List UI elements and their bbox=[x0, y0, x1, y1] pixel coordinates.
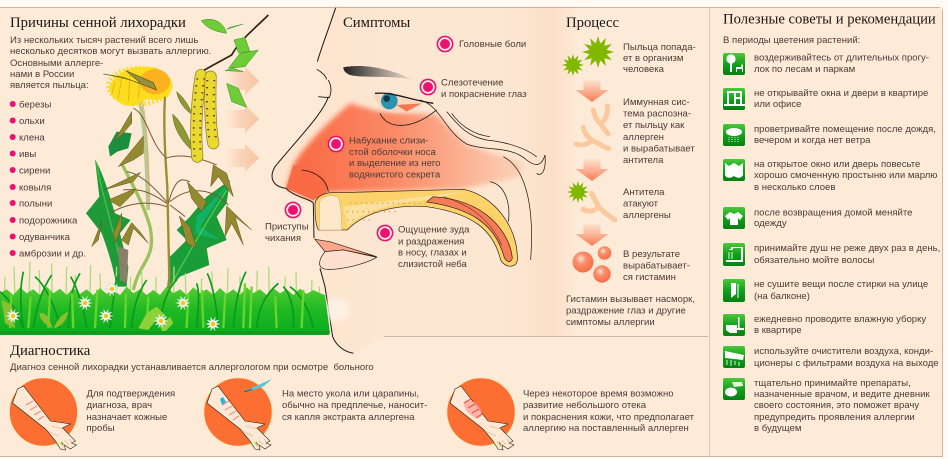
heading: process: Процесс bbox=[566, 15, 620, 31]
step 3: attack bbox=[567, 181, 671, 221]
tip: medication: предупредить проявления аллергии bbox=[754, 412, 915, 423]
step: reaction bbox=[447, 378, 695, 450]
illustration: grass meadow bbox=[0, 262, 330, 335]
step 1: pollen enters: ет в организм bbox=[623, 53, 684, 64]
allergen list: березы bbox=[19, 100, 51, 110]
lips bbox=[315, 239, 377, 257]
tip: air purifiers bbox=[723, 346, 939, 369]
intro text bbox=[10, 35, 211, 91]
tip: ventilate: вечером и когда нет ветра bbox=[754, 135, 871, 146]
process summary: симптомы аллергии bbox=[566, 317, 655, 328]
step: skin tests: диагноза, врач bbox=[86, 400, 152, 411]
tip: wet cleaning bbox=[723, 314, 926, 336]
heading: causes: Причины сенной лихорадки bbox=[10, 15, 186, 31]
symptom: itching: и раздражения bbox=[398, 236, 464, 248]
tip: windows: или офисе bbox=[754, 99, 801, 110]
step 4: histamine: вырабатывает- bbox=[623, 260, 690, 272]
step: reaction: аллергию на поставленный аллерген bbox=[523, 423, 689, 434]
symptom: itching: в носу, глазах и bbox=[398, 248, 467, 258]
allergen list: сирени bbox=[19, 166, 50, 176]
allergen list: амброзии и др. bbox=[19, 248, 86, 260]
face outline bbox=[272, 7, 353, 353]
panel: tips bbox=[723, 12, 940, 434]
arrow 1 bbox=[576, 80, 608, 102]
tip: medication: назначенные врачом, и ведите дневник bbox=[754, 389, 931, 400]
arrow 2 bbox=[576, 159, 608, 181]
tip: shower: обязательно мойте волосы bbox=[754, 255, 875, 266]
step 3: attack: аллергены bbox=[623, 210, 671, 221]
illustration: oat plant bbox=[92, 92, 252, 310]
symptom: swelling: водянистого секрета bbox=[349, 170, 441, 180]
step 2: antibodies: Иммунная сис- bbox=[623, 97, 690, 108]
heading: tips: Полезные советы и рекомендации bbox=[723, 12, 936, 28]
symptom: sneezing bbox=[265, 202, 309, 244]
tip: ventilate bbox=[723, 124, 936, 146]
symptom: tearing bbox=[420, 78, 527, 100]
symptom: itching: слизистой неба bbox=[398, 259, 467, 270]
symptom: itching: Ощущение зуда bbox=[398, 224, 470, 236]
allergen list: подорожника bbox=[19, 216, 78, 226]
allergen list: ольхи bbox=[19, 116, 45, 127]
tip: wet sheet bbox=[723, 159, 937, 193]
tip: wet sheet: хорошо смоченную простыню или марлю bbox=[754, 170, 937, 181]
intro text: нами в России bbox=[10, 69, 74, 80]
symptom: swelling: Набухание слизи- bbox=[349, 136, 428, 146]
step 1: pollen enters: человека bbox=[623, 64, 665, 75]
step: reaction: Через некоторое время возможно bbox=[523, 388, 674, 400]
allergen list: одуванчика bbox=[19, 232, 71, 243]
eye bbox=[373, 93, 437, 125]
tip: wet sheet: в несколько слоев bbox=[754, 182, 835, 193]
tip: change clothes: одежду bbox=[754, 218, 787, 229]
tip: forest: воздерживайтесь от длительных прогу- bbox=[754, 52, 929, 64]
tip: laundry: не сушите вещи после стирки на улице bbox=[754, 279, 928, 290]
sinus contour bbox=[420, 100, 545, 260]
process summary: Гистамин вызывает насморк, bbox=[566, 294, 695, 305]
tip: forest: лок по лесам и паркам bbox=[754, 64, 855, 75]
tip: change clothes bbox=[723, 207, 912, 229]
step: allergen drop: обычно на предплечье, наносит- bbox=[282, 400, 427, 411]
tip: laundry bbox=[723, 279, 928, 302]
step 2: antibodies: и вырабатывает bbox=[623, 144, 695, 154]
panel: diagnostics bbox=[10, 343, 695, 450]
step 2: antibodies: тема распозна- bbox=[623, 108, 691, 120]
nasal swelling bbox=[287, 103, 523, 200]
step: skin tests: пробы bbox=[86, 423, 115, 434]
tip: shower: принимайте душ не реже двух раз в день, bbox=[754, 243, 940, 254]
grass body bbox=[0, 287, 330, 333]
tip: windows: не открывайте окна и двери в квартире bbox=[754, 88, 928, 99]
step 1: pollen enters bbox=[562, 36, 696, 76]
step 2: antibodies bbox=[576, 97, 695, 166]
step: reaction: и покраснения кожи, что предполагает bbox=[523, 412, 695, 423]
panel: causes plants and grass bbox=[0, 15, 330, 335]
tip: medication: тщательно принимайте препараты, bbox=[754, 378, 911, 389]
face skin bbox=[272, 7, 580, 353]
allergen list: ивы bbox=[19, 149, 36, 160]
symptom: swelling: и выделение из него bbox=[349, 158, 440, 169]
symptom: sneezing: чихания bbox=[265, 233, 301, 244]
tip: ventilate: проветривайте помещение после дождя, bbox=[754, 124, 936, 135]
symptom: tearing: Слезотечение bbox=[441, 78, 503, 88]
tip: change clothes: после возвращения домой меняйте bbox=[754, 208, 912, 218]
step 2: antibodies: антитела bbox=[623, 155, 664, 166]
allergen list: ковыля bbox=[19, 182, 51, 194]
tip: wet cleaning: ежедневно проводите влажную уборку bbox=[754, 314, 926, 325]
symptom: swelling: стой оболочки носа bbox=[349, 147, 436, 158]
tip: wet sheet: на открытое окно или дверь повесьте bbox=[754, 159, 920, 170]
tip: medication: в будущем bbox=[754, 423, 801, 434]
step 3: attack: атакуют bbox=[623, 198, 659, 210]
allergen list bbox=[10, 100, 86, 260]
tips subheading: В периоды цветения растений: bbox=[723, 35, 860, 46]
directional pollen arrows bbox=[224, 67, 259, 172]
symptom: headache: Головные боли bbox=[459, 39, 526, 50]
symptom: sneezing: Приступы bbox=[265, 222, 309, 232]
allergen list: клена bbox=[19, 132, 45, 144]
step 2: antibodies: аллерген bbox=[623, 132, 664, 143]
step: skin tests: Для подтверждения bbox=[86, 388, 175, 400]
tip: medication: своего состояния, это поможет врачу bbox=[754, 400, 919, 411]
tip: medication bbox=[723, 378, 931, 434]
step 2: antibodies: ет пыльцу как bbox=[623, 120, 685, 131]
intro text: Основными аллерге- bbox=[10, 58, 103, 69]
intro text: несколько десятков могут вызвать аллергию. bbox=[10, 46, 211, 57]
symptom: tearing: и покраснение глаз bbox=[441, 89, 527, 100]
symptom: swelling bbox=[328, 136, 441, 180]
illustration: birch branch and catkins bbox=[194, 15, 268, 157]
symptom: headache bbox=[437, 36, 526, 52]
tip: air purifiers: используйте очистители воздуха, конди- bbox=[754, 346, 933, 357]
step 4: histamine: В результате bbox=[623, 249, 680, 260]
step 4: histamine bbox=[572, 246, 690, 283]
step: skin tests bbox=[10, 378, 175, 450]
intro text: Из нескольких тысяч растений всего лишь bbox=[10, 35, 198, 46]
pale background blades bbox=[3, 262, 320, 330]
bright blades bbox=[10, 283, 303, 328]
step: allergen drop: ся капля экстракта аллергена bbox=[282, 412, 415, 423]
process summary bbox=[566, 294, 695, 328]
heading: diagnostics: Диагностика bbox=[10, 343, 91, 359]
tip: windows bbox=[723, 88, 928, 110]
intro text: является пыльца: bbox=[10, 80, 89, 91]
panel: symptoms bbox=[265, 15, 527, 270]
tip: air purifiers: ционеры с фильтрами воздуха на выходе bbox=[754, 358, 939, 369]
arrow 3 bbox=[576, 224, 608, 246]
diagnostics intro: Диагноз сенной лихорадки устанавливается аллергологом при осмотре больного bbox=[10, 362, 374, 373]
tip: forest bbox=[723, 52, 929, 75]
dark blades bbox=[0, 272, 313, 328]
process summary: раздражение глаз и другие bbox=[566, 306, 686, 316]
step: skin tests: назначает кожные bbox=[86, 412, 167, 423]
step 4: histamine: ся гистамин bbox=[623, 272, 676, 283]
tip: shower bbox=[723, 243, 940, 266]
step: allergen drop bbox=[204, 378, 427, 450]
step 1: pollen enters: Пыльца попада- bbox=[623, 42, 696, 53]
tip: laundry: (на балконе) bbox=[754, 291, 810, 302]
heading: symptoms: Симптомы bbox=[343, 15, 410, 31]
allergen list: полыни bbox=[19, 198, 52, 210]
panel: process bbox=[562, 15, 696, 328]
illustration: dandelion leaves bbox=[86, 100, 230, 293]
step: allergen drop: На место укола или царапины, bbox=[282, 388, 419, 400]
step: reaction: развитие небольшого отека bbox=[523, 400, 647, 411]
illustration: dandelion flower bbox=[103, 67, 173, 106]
symptom: itching bbox=[377, 224, 470, 270]
illustration: human face cross-section bbox=[272, 7, 580, 353]
illustration: daisies bbox=[6, 282, 220, 331]
step 3: attack: Антитела bbox=[623, 187, 665, 198]
tip: wet cleaning: в квартире bbox=[754, 325, 802, 336]
panel: causes text bbox=[10, 15, 211, 260]
palate bbox=[315, 189, 517, 266]
eyebrow bbox=[343, 66, 413, 80]
